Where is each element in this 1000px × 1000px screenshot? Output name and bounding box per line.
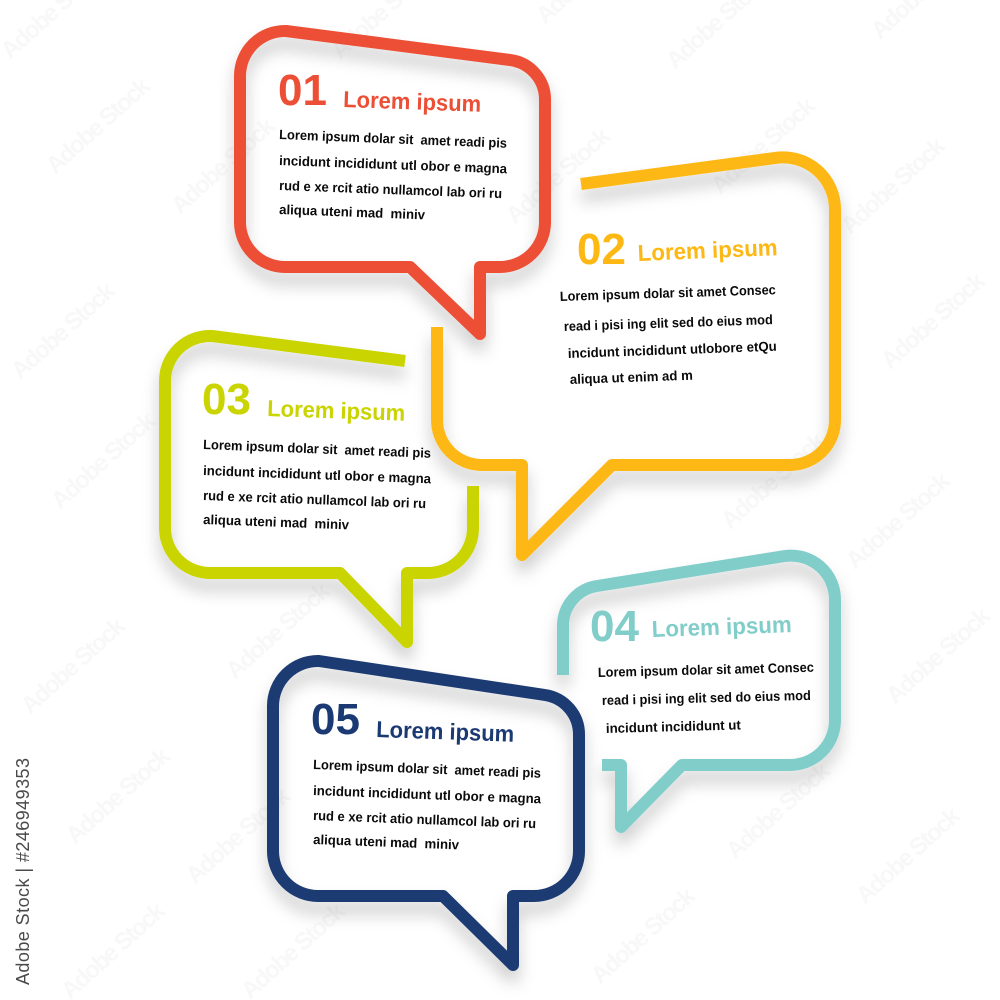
bubble outline 02	[437, 157, 835, 555]
watermark pattern: Adobe Stock	[851, 802, 966, 909]
watermark pattern: Adobe Stock	[221, 577, 336, 684]
body text 03: incidunt incididunt utl obor e magna	[203, 463, 432, 486]
watermark pattern: Adobe Stock	[706, 92, 821, 199]
body text 02: read i pisi ing elit sed do eius mod	[564, 312, 773, 334]
body text 02	[560, 282, 777, 387]
bubble outline 01	[240, 31, 545, 334]
watermark pattern: Adobe Stock	[586, 882, 701, 989]
panel: bubble 03 lime	[165, 336, 473, 642]
body text 03: Lorem ipsum dolar sit amet readi pis	[203, 437, 431, 461]
watermark pattern: Adobe Stock	[166, 112, 281, 219]
panel: bubble 04 teal	[563, 556, 835, 827]
watermark pattern: Adobe Stock	[46, 407, 161, 514]
body text 04	[598, 660, 814, 736]
watermark pattern: Adobe Stock	[881, 602, 996, 709]
watermark pattern: Adobe Stock	[721, 757, 836, 864]
body text 04: incidunt incididunt ut	[606, 717, 742, 736]
body text 01: incidunt incididunt utl obor e magna	[279, 153, 508, 176]
body text 01: rud e xe rcit atio nullamcol lab ori ru	[279, 178, 502, 201]
number 05: 05	[311, 695, 360, 744]
panel: bubble 01 red	[240, 31, 545, 334]
body text 01	[279, 127, 508, 222]
body text 02: aliqua ut enim ad m	[570, 368, 693, 387]
heading 03: Lorem ipsum	[267, 395, 406, 426]
body text 05	[313, 757, 542, 852]
body text 05: rud e xe rcit atio nullamcol lab ori ru	[313, 808, 536, 831]
body text 01: aliqua uteni mad miniv	[279, 202, 426, 222]
body text 03	[203, 437, 432, 532]
number 04: 04	[590, 602, 639, 651]
bubble outline 05	[273, 661, 579, 965]
bubble outline 03	[165, 336, 473, 642]
watermark pattern: Adobe Stock	[61, 742, 176, 849]
body text 05: Lorem ipsum dolar sit amet readi pis	[313, 757, 541, 781]
watermark pattern: Adobe Stock	[181, 782, 296, 889]
watermark pattern: Adobe Stock	[876, 267, 991, 374]
heading 05: Lorem ipsum	[376, 716, 515, 747]
body text 04: read i pisi ing elit sed do eius mod	[602, 688, 811, 708]
heading 01: Lorem ipsum	[343, 86, 482, 117]
stock credit: Adobe Stock | #246949353	[13, 758, 33, 985]
watermark pattern: Adobe Stock	[6, 277, 121, 384]
body text 01: Lorem ipsum dolar sit amet readi pis	[279, 127, 507, 151]
watermark pattern: Adobe Stock	[501, 122, 616, 229]
heading 04: Lorem ipsum	[651, 611, 792, 642]
body text 04: Lorem ipsum dolar sit amet Consec	[598, 660, 814, 680]
panel: bubble 05 navy	[273, 661, 579, 965]
watermark pattern: Adobe Stock	[716, 427, 831, 534]
number 01: 01	[278, 66, 327, 115]
body text 02: Lorem ipsum dolar sit amet Consec	[560, 282, 776, 304]
watermark pattern: Adobe Stock	[841, 467, 956, 574]
body text 02: incidunt incididunt utlobore etQu	[568, 339, 777, 361]
panel: bubble 02 yellow	[437, 157, 835, 555]
bubble outline 04	[563, 556, 835, 827]
body text 03: aliqua uteni mad miniv	[203, 512, 350, 532]
body text 05: aliqua uteni mad miniv	[313, 832, 460, 852]
heading 02: Lorem ipsum	[637, 234, 778, 266]
body text 03: rud e xe rcit atio nullamcol lab ori ru	[203, 488, 426, 511]
number 03: 03	[202, 375, 251, 424]
watermark pattern: Adobe Stock	[41, 72, 156, 179]
number 02: 02	[577, 225, 626, 274]
watermark pattern: Adobe Stock	[836, 132, 951, 239]
body text 05: incidunt incididunt utl obor e magna	[313, 783, 542, 806]
watermark pattern: Adobe Stock	[16, 612, 131, 719]
